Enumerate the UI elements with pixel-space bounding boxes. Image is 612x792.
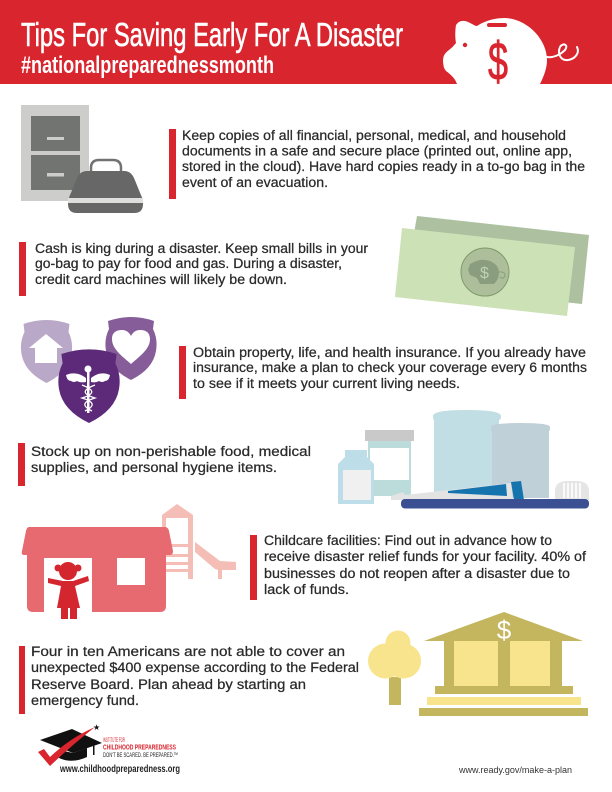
text block: childcare: receive disaster relief funds for your facility. 40% of bbox=[264, 549, 586, 564]
text block: documents: event of an evacuation. bbox=[182, 175, 328, 190]
logo: Institute for Childhood Preparedness: INSTITUTE FOR bbox=[103, 738, 125, 744]
text block: supplies: Stock up on non-perishable food, medical bbox=[31, 444, 311, 459]
logo: Institute for Childhood Preparedness bbox=[38, 723, 178, 766]
icon: food and medical supplies bbox=[338, 410, 589, 508]
text block: supplies: supplies, and personal hygiene items. bbox=[31, 460, 277, 475]
dark shield with caduceus bbox=[58, 349, 120, 423]
header banner bbox=[0, 0, 612, 92]
text block: cash: credit card machines will likely be down. bbox=[35, 272, 287, 287]
icon: insurance shields bbox=[21, 317, 157, 423]
text block: childcare bbox=[250, 533, 586, 600]
icon: piggy bank: $ bbox=[488, 32, 508, 92]
large can bbox=[433, 410, 501, 500]
text block: insurance: insurance, make a plan to check your coverage every 6 months bbox=[193, 360, 587, 375]
toothpaste bbox=[391, 481, 524, 500]
text block: emergency fund: unexpected $400 expense according to the Federal bbox=[31, 660, 359, 675]
medium shield with heart bbox=[105, 317, 157, 380]
text block: insurance bbox=[179, 345, 587, 399]
website link: ready.gov: www.ready.gov/make-a-plan bbox=[458, 765, 572, 776]
text block: emergency fund: Reserve Board. Plan ahead by starting an bbox=[31, 677, 306, 692]
icon: filing cabinet and bag bbox=[21, 105, 143, 213]
text block: emergency fund: Four in ten Americans are not able to cover an bbox=[31, 644, 345, 659]
title: Tips For Saving Early For A Disaster bbox=[21, 16, 403, 53]
text block: cash: go-bag to pay for food and gas. During a disaster, bbox=[35, 256, 342, 271]
jar bbox=[365, 430, 414, 496]
girl bbox=[48, 562, 89, 619]
text block: childcare: lack of funds. bbox=[264, 582, 349, 597]
text block: emergency fund: emergency fund. bbox=[31, 693, 139, 708]
bottle bbox=[338, 450, 374, 504]
text block: cash: Cash is king during a disaster. Keep small bills in your bbox=[35, 241, 369, 256]
text block: childcare: businesses do not reopen after a disaster due to bbox=[264, 566, 570, 581]
icon: banknotes: $ bbox=[480, 265, 489, 282]
text block: documents bbox=[169, 128, 585, 199]
text block: emergency fund bbox=[19, 644, 359, 714]
text block: documents: Keep copies of all financial, personal, medical, and household bbox=[182, 128, 566, 143]
icon: banknotes bbox=[395, 216, 589, 316]
text block: supplies bbox=[18, 443, 311, 486]
icon: tree bbox=[368, 630, 421, 705]
icon: childcare building and playground bbox=[22, 504, 236, 619]
logo: Institute for Childhood Preparedness: DON'T BE SCARED. BE PREPARED.™ bbox=[103, 752, 178, 759]
icon: bank bbox=[419, 612, 588, 716]
icon: bank: $ bbox=[497, 615, 512, 645]
playground bbox=[162, 504, 236, 579]
small can bbox=[491, 423, 550, 498]
website link: childhoodpreparedness: www.childhoodpreparedness.org bbox=[59, 763, 180, 775]
icon: piggy bank bbox=[443, 18, 579, 84]
text block: insurance: Obtain property, life, and health insurance. If you already have bbox=[193, 345, 586, 360]
text block: documents: documents in a safe and secure place (printed out, online app, bbox=[182, 144, 572, 158]
building bbox=[22, 527, 173, 612]
text block: childcare: Childcare facilities: Find out in advance how to bbox=[264, 533, 552, 548]
toothbrush bbox=[401, 481, 589, 508]
logo: Institute for Childhood Preparedness: CHILDHOOD PREPAREDNESS bbox=[103, 744, 176, 752]
logo: Institute for Childhood Preparedness: ★ bbox=[93, 723, 100, 732]
hashtag subtitle: #nationalpreparednessmonth bbox=[21, 52, 274, 79]
light shield with house bbox=[21, 320, 72, 383]
text block: cash bbox=[19, 241, 369, 296]
text block: documents: stored in the cloud). Have hard copies ready in a to-go bag in the bbox=[182, 159, 585, 174]
text block: insurance: to see if it meets your current living needs. bbox=[193, 376, 460, 391]
